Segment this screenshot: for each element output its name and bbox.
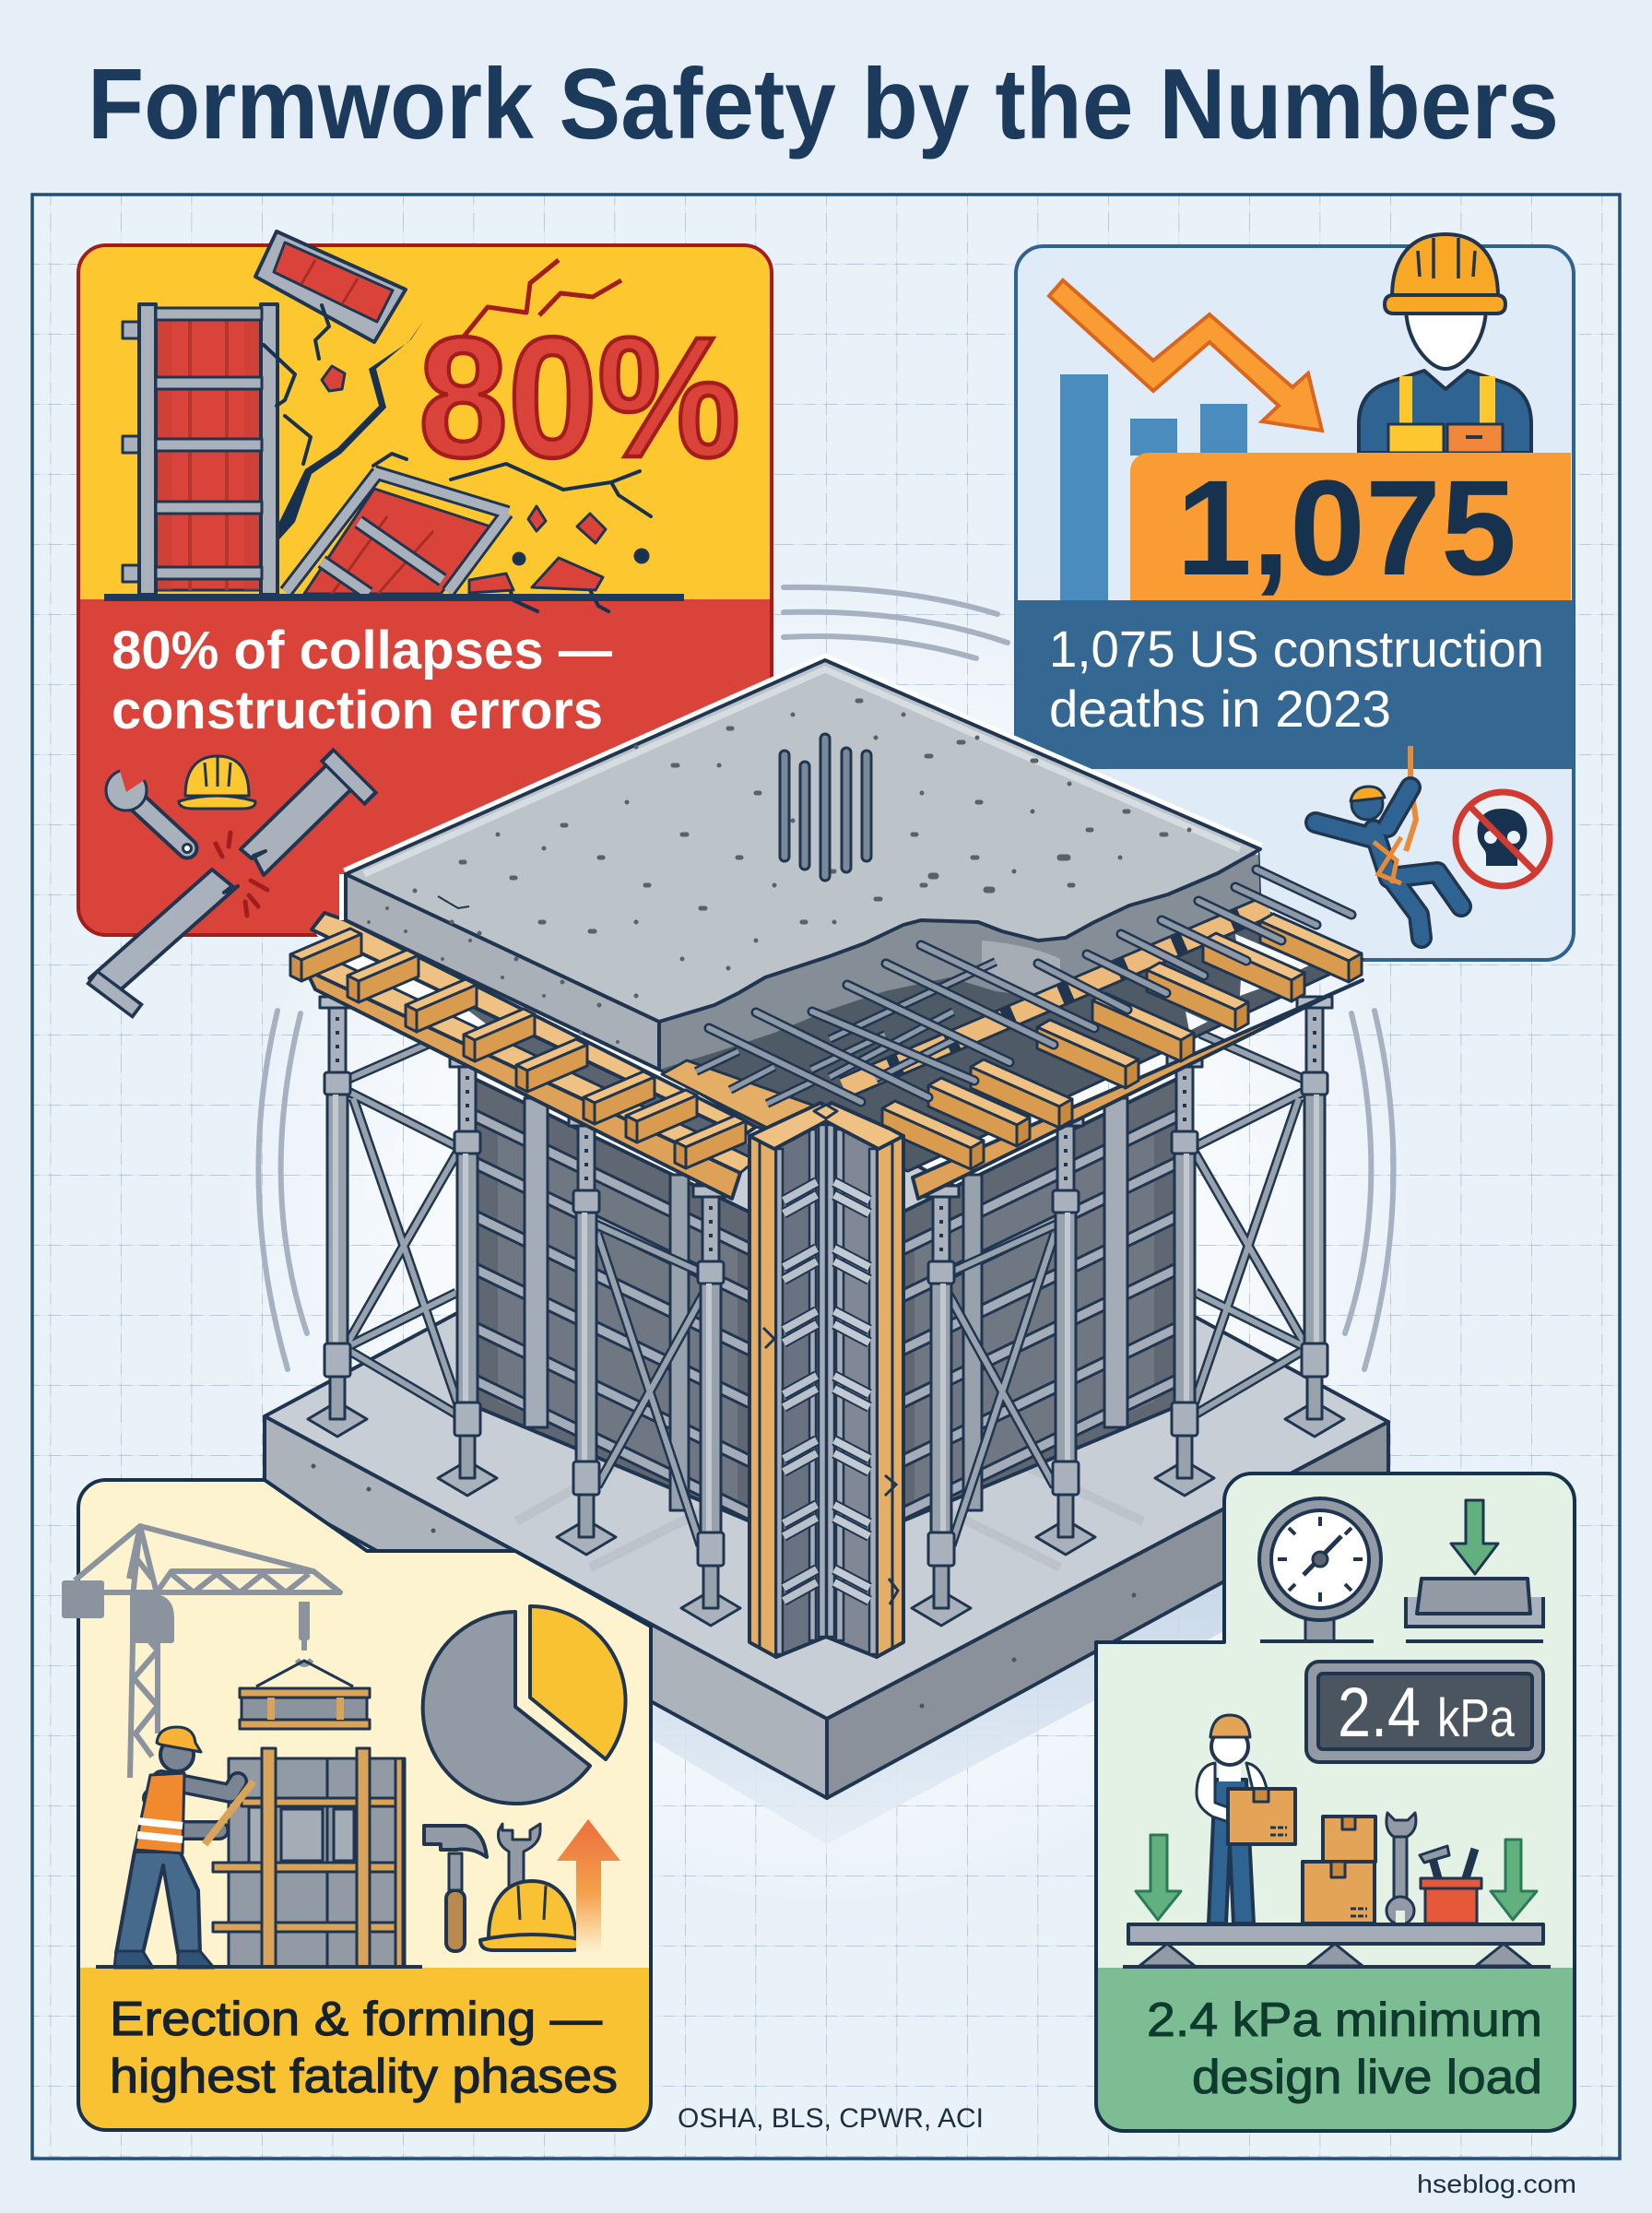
corner column xyxy=(749,1103,903,1657)
title: Formwork Safety by the Numbers xyxy=(88,48,1559,160)
central formwork structure xyxy=(265,660,1388,1844)
vibration arcs xyxy=(258,587,1394,1369)
icon: upright formwork panel xyxy=(123,304,277,595)
blue caption band xyxy=(1016,600,1574,769)
caption: collapses: construction errors xyxy=(112,680,603,740)
timber deck and rebar: right side xyxy=(659,853,1363,1199)
icon: worker carrying box xyxy=(1197,1715,1295,1923)
cracks xyxy=(264,260,651,611)
icon: no skull sign xyxy=(1456,792,1550,886)
icon: tower crane xyxy=(65,1526,340,1778)
icon: wrench and tool bucket xyxy=(1386,1813,1481,1925)
caption: deaths: deaths in 2023 xyxy=(1049,680,1391,738)
debris xyxy=(322,366,648,593)
formwork wall: right xyxy=(902,1079,1177,1521)
icon: fallen formwork panel xyxy=(286,472,508,594)
icon: formwork being erected xyxy=(213,1748,405,1967)
icon: falling worker with harness xyxy=(1316,746,1461,938)
concrete footing xyxy=(265,1116,1388,1798)
icon: suspended formwork load xyxy=(240,1661,370,1729)
speckles on slab xyxy=(369,701,1189,1042)
digital readout: kPa xyxy=(1437,1688,1516,1748)
caption: live load: design live load xyxy=(1192,2051,1542,2104)
big stat: 1,075: 1,075 xyxy=(1176,453,1516,604)
panel: 1,075 deaths xyxy=(1016,234,1574,960)
shoring props and braces: left xyxy=(308,997,740,1626)
site credit: hseblog.com xyxy=(1417,2170,1576,2198)
drop shadow xyxy=(332,1494,1291,1844)
timber deck: left side xyxy=(290,913,756,1199)
ground line xyxy=(96,1965,422,1969)
caption: deaths: 1,075 US construction xyxy=(1049,620,1544,678)
pie chart xyxy=(423,1606,626,1804)
orange stat band xyxy=(1130,453,1571,600)
caption: fatality phases: highest fatality phases xyxy=(110,2050,618,2103)
big stat: 80%: 80% xyxy=(419,302,740,493)
rebar starters xyxy=(780,734,871,881)
caption: fatality phases: Erection & forming — xyxy=(110,1993,602,2046)
icon: worker xyxy=(1359,234,1531,453)
digital readout xyxy=(1306,1662,1543,1762)
icon: load on plate xyxy=(1406,1500,1543,1641)
icon: wrench xyxy=(106,764,192,852)
formwork wall: left xyxy=(475,1079,750,1521)
icon: broken steel prop xyxy=(89,754,372,1012)
source line: OSHA, BLS, CPWR, ACI xyxy=(678,2103,984,2134)
panel: 80% collapses xyxy=(78,231,772,1012)
shoring props and braces: right xyxy=(912,997,1344,1626)
icon: worker with vest xyxy=(114,1727,254,1968)
icon: hammer xyxy=(424,1826,487,1951)
panel: minimum design live load xyxy=(1096,1473,1575,2131)
beam on supports xyxy=(1123,1924,1551,1969)
arrow: falling trend xyxy=(1049,280,1322,431)
icon: stacked boxes xyxy=(1303,1817,1375,1923)
ground line xyxy=(104,594,684,601)
icon: hard hat xyxy=(179,756,255,809)
arrow: rising risk xyxy=(557,1819,620,1952)
icon: pressure gauge xyxy=(1259,1498,1381,1641)
icon: falling formwork panel xyxy=(255,231,406,342)
panel: erection and forming xyxy=(65,1480,651,2130)
icon: wrench and helmet xyxy=(480,1824,584,1950)
bar chart xyxy=(1060,374,1247,600)
caption: collapses: 80% of collapses — xyxy=(112,621,612,680)
arrows: distributed load xyxy=(1136,1835,1537,1920)
concrete slab xyxy=(346,660,1260,1070)
caption: live load: 2.4 kPa minimum xyxy=(1147,1994,1542,2047)
digital readout: 2.4 xyxy=(1338,1674,1421,1752)
